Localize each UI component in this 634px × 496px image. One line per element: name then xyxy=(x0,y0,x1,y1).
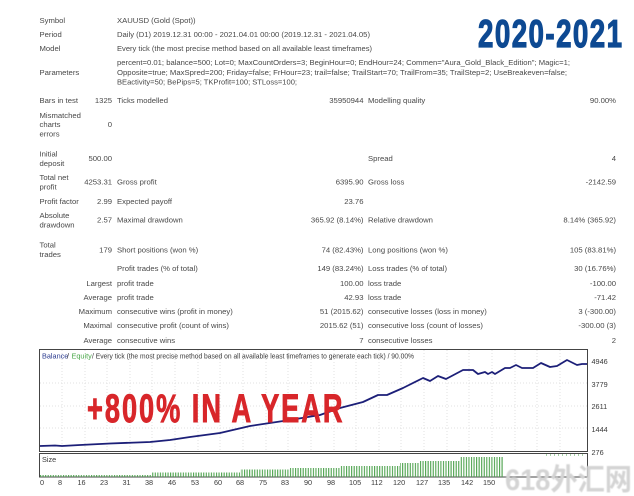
x axis labels: 60 xyxy=(214,478,222,487)
report settings table: Daily (D1) 2019.12.31 00:00 - 2021.04.01 00:00 (2019.12.31 - 2021.04.05) xyxy=(117,30,370,39)
x axis labels: 150 xyxy=(483,478,495,487)
x axis labels: 105 xyxy=(349,478,361,487)
chart legend line: Equity xyxy=(72,352,92,360)
report settings table: BEactivity=50; BePips=5; TKProfit=100; STLoss=100; xyxy=(117,78,297,86)
report results table: Gross profit xyxy=(117,178,158,186)
report results table: Initial xyxy=(40,150,58,158)
report results table: Profit factor xyxy=(40,197,79,206)
report results table xyxy=(40,150,617,230)
report settings table: errors xyxy=(40,130,60,138)
report settings table: 0 xyxy=(108,120,112,129)
trade statistics table: consecutive loss (count of losses) xyxy=(368,321,483,330)
report settings table: Mismatched xyxy=(40,111,81,120)
trade statistics table: Loss trades (% of total) xyxy=(368,264,447,273)
chart legend line: / Every tick (the most precise method based on all available least timeframes to generate each tick) / 90.00% xyxy=(92,352,414,360)
trade statistics table: Maximal xyxy=(83,321,112,330)
report settings table: Parameters xyxy=(40,68,79,77)
report results table: 8.14% (365.92) xyxy=(563,216,616,224)
right axis labels: 4946 xyxy=(592,357,608,366)
x axis labels: 68 xyxy=(236,478,244,487)
trade statistics table: loss trade xyxy=(368,293,401,302)
report settings table: Modelling quality xyxy=(368,96,425,105)
report results table: 2.99 xyxy=(97,197,112,206)
right axis labels: 3779 xyxy=(592,380,608,389)
report settings table: charts xyxy=(40,120,61,129)
report settings table: Model xyxy=(40,44,61,53)
trade statistics table: consecutive losses (loss in money) xyxy=(368,307,487,316)
trade statistics table: 30 (16.76%) xyxy=(574,264,616,273)
trade statistics table: trades xyxy=(40,250,61,259)
report results table: deposit xyxy=(40,159,65,168)
x axis labels: 142 xyxy=(461,478,473,487)
trade statistics table: 2 xyxy=(612,336,616,345)
chart legend line: / xyxy=(67,352,70,360)
title: 2020-2021: 2020-2021 xyxy=(478,14,623,56)
trade statistics table: consecutive wins (profit in money) xyxy=(117,307,233,316)
report results table: 500.00 xyxy=(88,154,112,163)
trade statistics table: 105 (83.81%) xyxy=(570,246,616,254)
trade statistics table: -71.42 xyxy=(594,293,616,302)
trade statistics table: Short positions (won %) xyxy=(117,246,199,254)
trade statistics table: 74 (82.43%) xyxy=(322,246,364,254)
trade statistics table: profit trade xyxy=(117,279,154,288)
report results table: Expected payoff xyxy=(117,197,173,206)
trade statistics table: consecutive wins xyxy=(117,336,175,345)
trade statistics table: Average xyxy=(84,336,112,345)
report settings table: 35950944 xyxy=(329,96,364,105)
right axis labels: 1444 xyxy=(592,425,608,434)
x axis labels: 75 xyxy=(259,478,267,487)
report settings table: Every tick (the most precise method based on all available least timeframes) xyxy=(117,44,372,53)
report settings table: Period xyxy=(40,30,62,39)
x axis labels: 16 xyxy=(78,478,86,487)
report results table: Gross loss xyxy=(368,178,404,186)
trade statistics table: Total xyxy=(40,240,56,250)
report results table: 4 xyxy=(612,154,617,163)
trade statistics table: -100.00 xyxy=(590,279,616,288)
x axis labels: 0 xyxy=(40,478,44,487)
x axis labels: 23 xyxy=(100,478,108,487)
report results table: Absolute xyxy=(40,211,69,220)
trade statistics table: 149 (83.24%) xyxy=(317,264,364,273)
right axis labels xyxy=(592,357,608,457)
report settings table: Ticks modelled xyxy=(117,96,168,105)
chart legend line: Balance xyxy=(42,352,68,360)
trade statistics table: 2015.62 (51) xyxy=(320,321,364,330)
report settings table: percent=0.01; balance=500; Lot=0; MaxCountOrders=3; BeginHour=0; EndHour=24; Commen="Aura_Gold_Black_Edition"; Magic=1; xyxy=(117,58,570,67)
right axis labels: 2611 xyxy=(592,402,607,411)
trade statistics table: Profit trades (% of total) xyxy=(117,264,198,273)
x axis labels: 38 xyxy=(145,478,153,487)
trade statistics table: loss trade xyxy=(368,279,401,288)
x axis labels: 83 xyxy=(281,478,289,487)
report results table: Relative drawdown xyxy=(368,216,433,224)
x axis labels: 112 xyxy=(371,478,383,487)
report settings table: Bars in test xyxy=(40,96,79,105)
report results table: profit xyxy=(40,182,57,192)
x axis labels: 135 xyxy=(438,478,450,487)
x axis labels: 90 xyxy=(304,478,312,487)
report results table: -2142.59 xyxy=(586,178,616,186)
trade statistics table: profit trade xyxy=(117,293,154,302)
report results table: Maximal drawdown xyxy=(117,216,183,224)
trade statistics table: 3 (-300.00) xyxy=(578,307,616,316)
report results table: drawdown xyxy=(40,220,75,230)
trade statistics table: consecutive profit (count of wins) xyxy=(117,321,229,330)
report settings table: 1325 xyxy=(95,96,112,105)
trade statistics table: Average xyxy=(84,293,112,302)
x axis labels: 98 xyxy=(327,478,335,487)
x axis labels: 46 xyxy=(168,478,176,487)
trade statistics table: -300.00 (3) xyxy=(578,321,616,330)
x axis labels: 8 xyxy=(58,478,62,487)
report results table: 6395.90 xyxy=(336,178,364,186)
report settings table: 90.00% xyxy=(590,96,616,105)
trade statistics table: Long positions (won %) xyxy=(368,246,448,254)
trade statistics table: Maximum xyxy=(79,307,112,316)
report results table: 2.57 xyxy=(97,216,112,224)
size bar chart panel xyxy=(40,454,588,477)
x axis labels: 120 xyxy=(393,478,405,487)
x axis labels: 53 xyxy=(191,478,199,487)
x axis labels: 127 xyxy=(416,478,428,487)
trade statistics table: 42.93 xyxy=(344,293,364,302)
balance chart panel xyxy=(40,350,588,452)
x axis labels: 31 xyxy=(122,478,131,487)
report settings table: XAUUSD (Gold (Spot)) xyxy=(117,16,196,25)
report results table: 365.92 (8.14%) xyxy=(311,216,364,224)
report settings table: Opposite=true; MaxSpred=200; Friday=false; FrHour=23; trail=false; TrailStart=70; TrailFrom=35; TrailStep=2; UseBreakeven=false; xyxy=(117,68,567,77)
trade statistics table: 100.00 xyxy=(340,279,364,288)
trade statistics table xyxy=(40,240,616,345)
size bar chart panel: Size xyxy=(42,455,56,464)
report settings table: Symbol xyxy=(40,16,65,25)
right axis labels: 276 xyxy=(592,448,604,457)
report results table: 23.76 xyxy=(344,197,364,206)
report results table: Total net xyxy=(40,173,69,182)
trade statistics table: 179 xyxy=(99,246,112,254)
x axis labels xyxy=(40,478,495,487)
trade statistics table: consecutive losses xyxy=(368,336,433,345)
balance curve xyxy=(40,360,587,446)
headline: +800% in a year: +800% IN A YEAR xyxy=(87,387,345,431)
report results table: Spread xyxy=(368,154,393,163)
report settings table xyxy=(40,16,616,138)
trade statistics table: 7 xyxy=(359,336,364,345)
trade statistics table: Largest xyxy=(86,279,113,288)
report results table: 4253.31 xyxy=(84,178,112,186)
trade statistics table: 51 (2015.62) xyxy=(320,307,364,316)
